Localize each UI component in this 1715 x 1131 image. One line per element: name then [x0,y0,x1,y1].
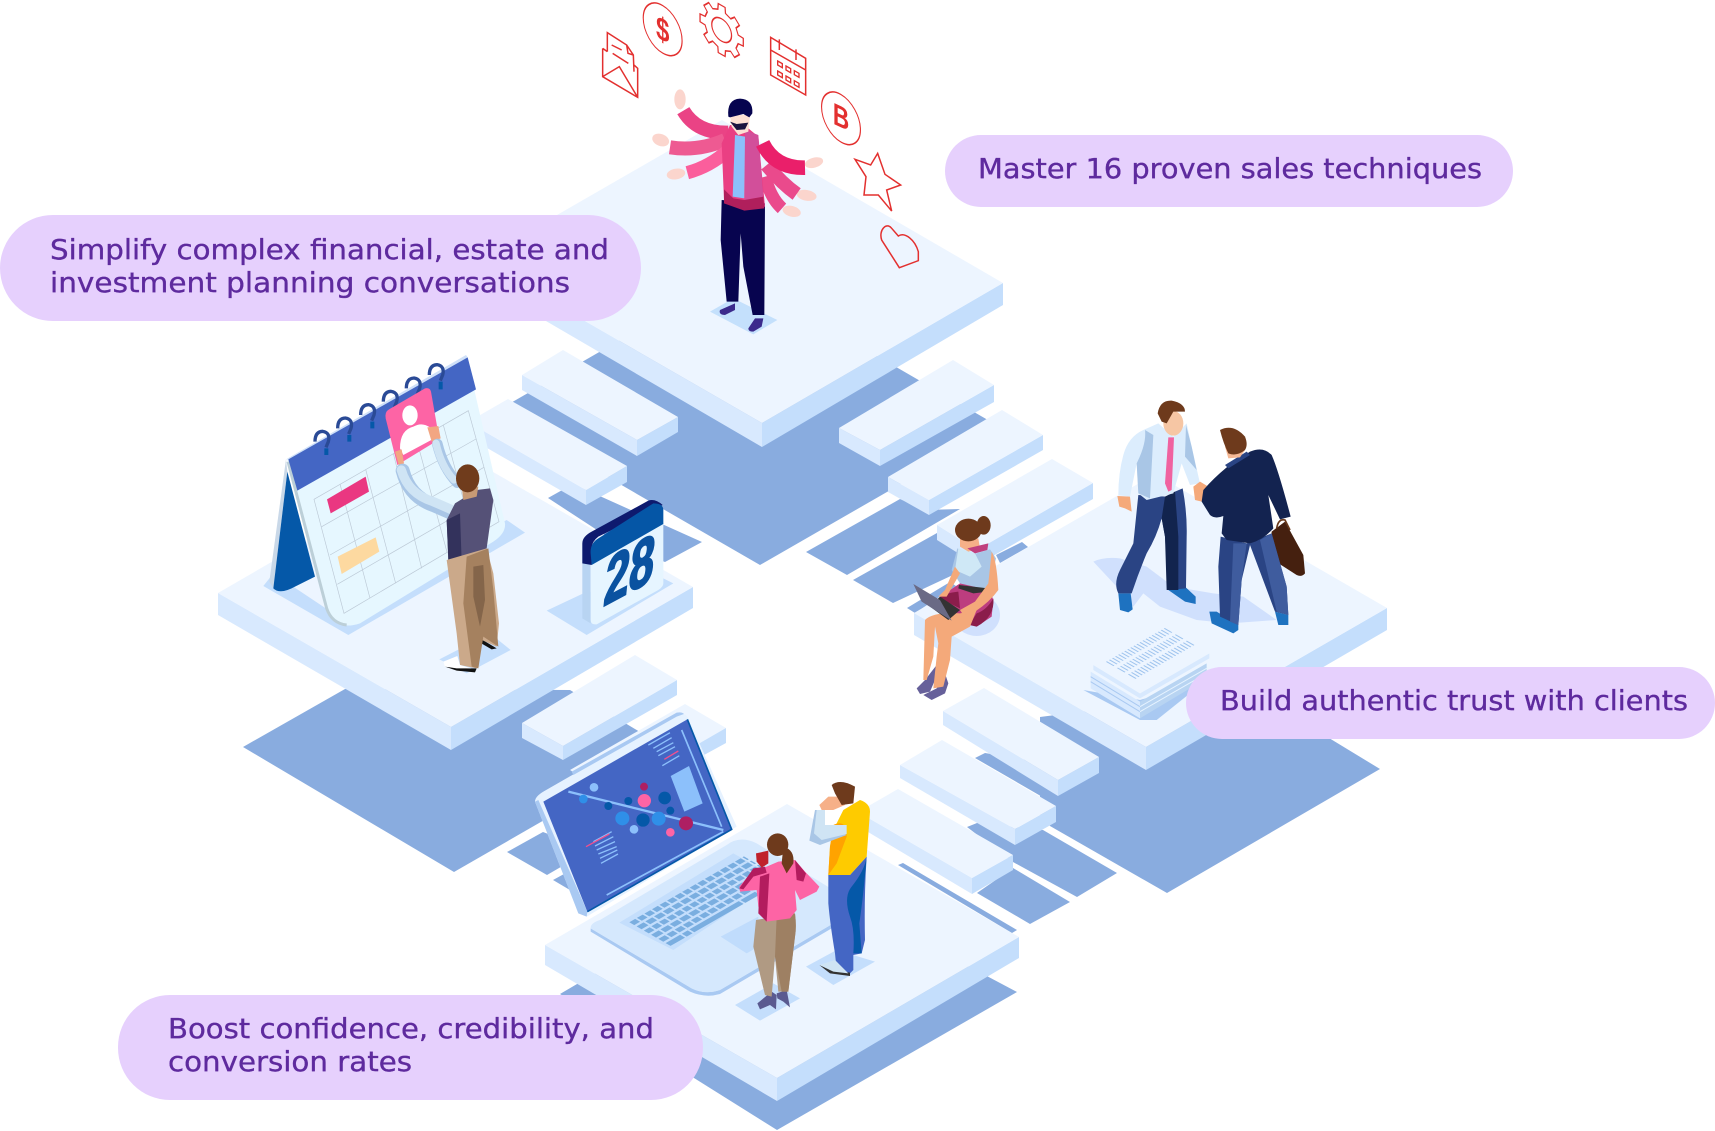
person: woman with laptop [913,516,1000,700]
callout: simplify conversations [0,215,641,321]
person: man with briefcase [1193,428,1305,633]
callout: boost confidence: conversion rates [168,1045,412,1078]
person: man placing card [395,426,511,673]
desk calendar 28: 28 [601,518,659,621]
icon: dollar coin [643,0,682,64]
callout: boost confidence: Boost confidence, credibility, and [168,1012,654,1045]
callout: master techniques: Master 16 proven sales techniques [978,152,1482,185]
callout: boost confidence [118,995,703,1100]
callout: authentic trust: Build authentic trust with clients [1220,684,1688,717]
laptop [535,712,833,996]
icon: heart [881,226,918,268]
icon: bitcoin: B [833,96,849,138]
person: woman with coffee [735,833,819,1021]
step blocks [468,350,1099,894]
callout: authentic trust [1186,667,1715,739]
platform: bottom [545,804,1019,1101]
calendar scene [263,355,673,673]
platform: top [479,120,1003,447]
laptop scene [535,712,875,1021]
platform: right [914,474,1387,770]
callout: simplify conversations: investment planning conversations [50,266,570,299]
handshake and reading scene [913,401,1305,720]
icon: gear [700,0,743,67]
platform: left [218,453,693,750]
callout: simplify conversations: Simplify complex financial, estate and [50,233,609,266]
desk calendar 28 [547,500,673,635]
person: man in shirt [1116,401,1200,612]
person: man in yellow [806,782,875,985]
wall calendar [269,355,505,626]
floor shadows [243,274,1380,1130]
chart on screen [568,730,723,895]
icon: calendar [771,37,806,95]
callout: master techniques [945,135,1513,207]
juggling figure and icons [603,0,918,334]
paper stack [1083,625,1209,720]
icon: dollar coin: $ [656,9,670,52]
profile card [385,388,439,465]
icon: bitcoin [822,83,860,153]
icon: star [855,153,901,211]
icon: envelope [603,33,638,97]
person: many-armed presenter [650,89,824,334]
